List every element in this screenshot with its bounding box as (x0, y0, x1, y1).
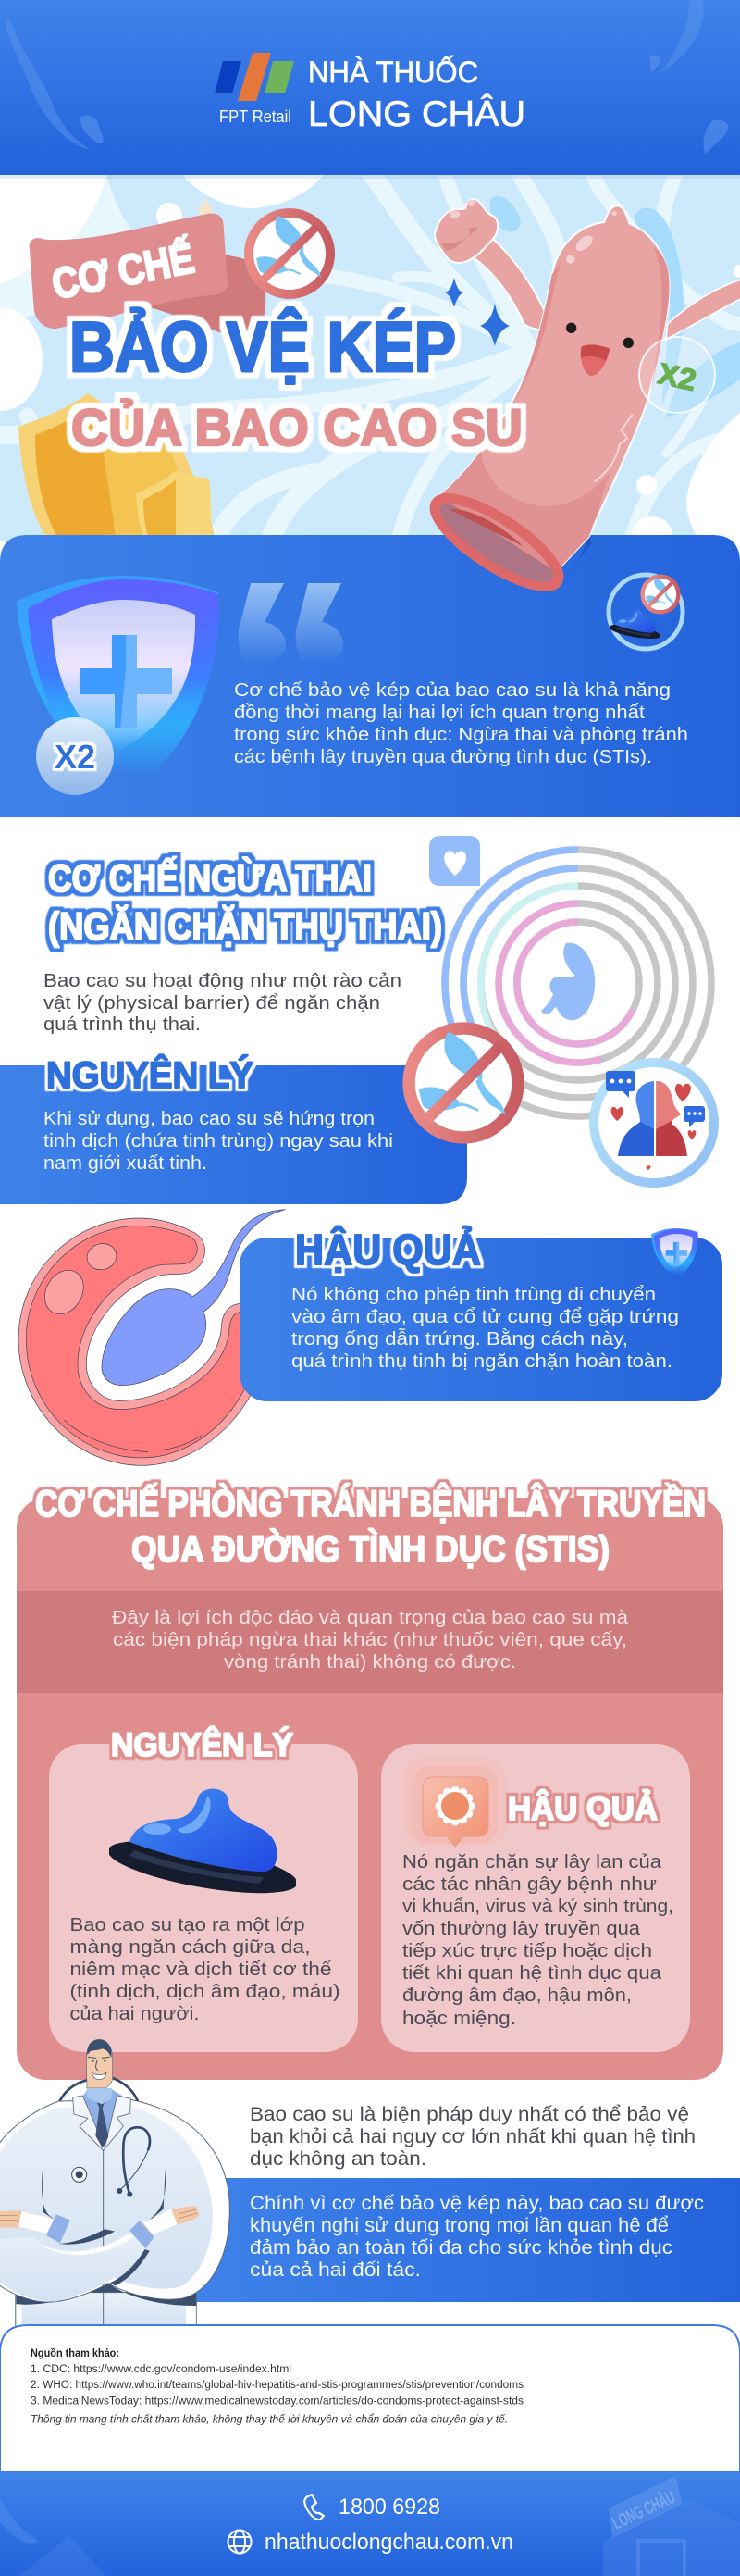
body: trong ống dẫn trứng. Bằng cách này, (291, 1328, 628, 1350)
icon: fetus (541, 943, 595, 1020)
lower coat (16, 2293, 196, 2328)
chart: concentric rings (445, 850, 711, 1116)
icon: no sperm sign (249, 213, 330, 294)
crossed arms (0, 2224, 154, 2302)
intro band: các biện pháp ngừa thai khác (như thuốc viên, que cấy, (113, 1630, 627, 1650)
card text: của hai người. (70, 2004, 200, 2024)
logo: FPT Retail (215, 53, 294, 126)
banner: co che (30, 214, 265, 340)
heading: QUA ĐƯỜNG TÌNH DỤC (STIS) (131, 1527, 610, 1570)
body: vào âm đạo, qua cổ tử cung để gặp trứng (291, 1307, 679, 1327)
illustration: doctor (0, 2039, 229, 2328)
text: only method: dục không an toàn. (250, 2148, 426, 2170)
icon: small shield (651, 1228, 698, 1275)
heading: co che ngua thai: (NGĂN CHẶN THỤ THAI) (48, 904, 442, 948)
title: bao ve kep: BẢO VỆ KÉP (69, 307, 456, 387)
icon: gold shield (18, 393, 215, 537)
icon: globe (228, 2531, 252, 2553)
face and shine (566, 323, 576, 333)
icon: sparkles (445, 278, 510, 346)
panel: references: Nguồn tham khảo: (31, 2346, 119, 2359)
torso (0, 2099, 229, 2302)
card text (70, 1915, 340, 2024)
logo wordmark: Nhà thuốc Long Châu: LONG CHÂU (308, 94, 525, 134)
body: nam giới xuất tinh. (43, 1153, 207, 1174)
banner: co che: CƠ CHẾ (48, 233, 198, 308)
icon: x2 bubble (36, 717, 114, 795)
heading (35, 1482, 706, 1570)
footer band (0, 2472, 740, 2576)
character: smiling condom (433, 199, 740, 586)
panel: references: Thông tin mang tính chất tham khảo, không thay thế lời khuyên và chẩn đoán của chuyên gia y tế. (31, 2414, 508, 2425)
body (291, 1285, 679, 1372)
icon: quotation mark (239, 583, 343, 665)
heading: co che ngua thai (48, 855, 442, 948)
shirt, lapels and tie (82, 2089, 123, 2149)
right arm (666, 280, 740, 340)
panel: recommendation: khuyến nghị sử dụng trong mọi lần quan hệ để (250, 2215, 669, 2236)
header band (0, 0, 740, 179)
text: only method (250, 2104, 696, 2170)
left arm and fist (435, 199, 546, 330)
card text: Nó ngăn chặn sự lây lan của (402, 1852, 662, 1873)
card text: vốn thường lây truyền qua (402, 1919, 641, 1939)
icon: germ badge (402, 1757, 507, 1847)
card: hau qua (381, 1744, 690, 2052)
panel: recommendation (196, 2178, 740, 2302)
card text: niêm mạc và dịch tiết cơ thể (70, 1960, 331, 1980)
faint store building: LONG CHÂU (609, 2485, 678, 2534)
card text: tiết khi quan hệ tình dục qua (402, 1963, 662, 1984)
card text: hoặc miệng. (402, 2009, 516, 2029)
icon: blue condom (105, 1789, 301, 1904)
card text: tiếp xúc trực tiếp hoặc dịch (402, 1941, 652, 1961)
body: quá trình thụ tinh bị ngăn chặn hoàn toàn. (291, 1351, 672, 1372)
icon: heart bubble (429, 836, 480, 886)
intro text: các bệnh lây truyền qua đường tình dục (STIs). (234, 747, 652, 767)
card text (402, 1852, 673, 2029)
text: contraception intro (43, 971, 401, 1035)
icon: phone (304, 2495, 324, 2520)
card text: các tác nhân gây bệnh như (402, 1874, 657, 1895)
shadow under opening (561, 537, 592, 583)
panel: hau qua (240, 1226, 722, 1401)
condom opening (429, 493, 564, 591)
panel: recommendation: của cả hai đối tác. (250, 2259, 421, 2281)
logo: FPT Retail: FPT Retail (219, 107, 291, 126)
body: tinh dịch (chứa tinh trùng) ngay sau khi (43, 1131, 393, 1151)
card text: (tinh dịch, dịch âm đạo, máu) (70, 1982, 340, 2002)
card heading: HẬU QUẢ (508, 1788, 658, 1827)
card heading: NGUYÊN LÝ (111, 1726, 293, 1763)
card text: đường âm đạo, hậu môn, (402, 1985, 632, 2006)
panel: references: 3. MedicalNewsToday: https://www.medicalnewstoday.com/articles/do-condoms-protect-against-stds (31, 2396, 524, 2407)
body (433, 205, 670, 586)
text: contraception intro: vật lý (physical barrier) để ngăn chặn (43, 993, 380, 1014)
intro band: Đây là lợi ích độc đáo và quan trọng của bao cao su mà (112, 1608, 629, 1628)
logo wordmark: Nhà thuốc Long Châu (308, 56, 525, 134)
stethoscope tube behind (56, 2080, 87, 2169)
icon: x2 bubble: X2 (55, 738, 95, 776)
panel: nguyen ly (0, 1053, 467, 1204)
intro band: vòng tránh thai) không có được. (224, 1652, 516, 1673)
phone number: 1800 6928 (339, 2495, 440, 2520)
card text: Bao cao su tạo ra một lớp (70, 1915, 305, 1935)
intro text: Cơ chế bảo vệ kép của bao cao su là khả năng (234, 680, 671, 701)
card text: vi khuẩn, virus và ký sinh trùng, (402, 1897, 673, 1917)
stethoscope front (123, 2127, 150, 2194)
icon: x2 green bubble: X2 (655, 356, 699, 397)
panel: references (0, 2325, 740, 2472)
intro band (17, 1591, 723, 1693)
text: contraception intro: quá trình thụ thai. (43, 1014, 201, 1035)
intro text (234, 680, 688, 767)
heading: NGUYÊN LÝ (46, 1053, 253, 1096)
icon: x2 green bubble (639, 337, 715, 413)
card: nguyen ly (49, 1726, 358, 2052)
body (43, 1109, 393, 1174)
hero background (0, 171, 740, 554)
illustration: sperm and barrier (18, 1210, 285, 1465)
intro text: đồng thời mang lại hai lợi ích quan trọng nhất (234, 703, 645, 723)
intro text: trong sức khỏe tình dục: Ngừa thai và phòng tránh (234, 725, 688, 745)
text: only method: bạn khỏi cả hai nguy cơ lớn nhất khi quan hệ tình (250, 2126, 696, 2147)
icon: condom and no sperm circle (609, 575, 683, 649)
card text: màng ngăn cách giữa da, (70, 1937, 311, 1958)
body: Nó không cho phép tinh trùng di chuyển (291, 1285, 656, 1305)
icon: no sperm large (409, 1028, 518, 1138)
panel: sti protection (17, 1482, 723, 2080)
heading: co che ngua thai: CƠ CHẾ NGỪA THAI (48, 855, 372, 900)
title: cua bao cao su: CỦA BAO CAO SU (71, 398, 523, 456)
panel: recommendation: đảm bảo an toàn tối đa cho sức khỏe tình dục (250, 2237, 672, 2259)
panel: references: 1. CDC: https://www.cdc.gov/condom-use/index.html (31, 2364, 291, 2375)
icon: shield with plus (17, 576, 218, 775)
icon: couple circle (594, 1063, 714, 1183)
panel: intro (0, 535, 740, 817)
website: nhathuoclongchau.com.vn (265, 2530, 513, 2555)
text: only method: Bao cao su là biện pháp duy nhất có thể bảo vệ (250, 2104, 689, 2125)
text: contraception intro: Bao cao su hoạt động như một rào cản (43, 971, 401, 991)
panel: references: 2. WHO: https://www.who.int/teams/global-hiv-hepatitis-and-stis-programmes/stis/prevention/condoms (31, 2380, 524, 2391)
faint store building (603, 2476, 740, 2576)
heading: HẬU QUẢ (295, 1226, 481, 1274)
head (86, 2039, 113, 2088)
panel: recommendation: Chính vì cơ chế bảo vệ kép này, bao cao su được (250, 2193, 704, 2214)
logo wordmark: Nhà thuốc Long Châu: NHÀ THUỐC (308, 56, 478, 89)
body: Khi sử dụng, bao cao su sẽ hứng trọn (43, 1109, 375, 1129)
